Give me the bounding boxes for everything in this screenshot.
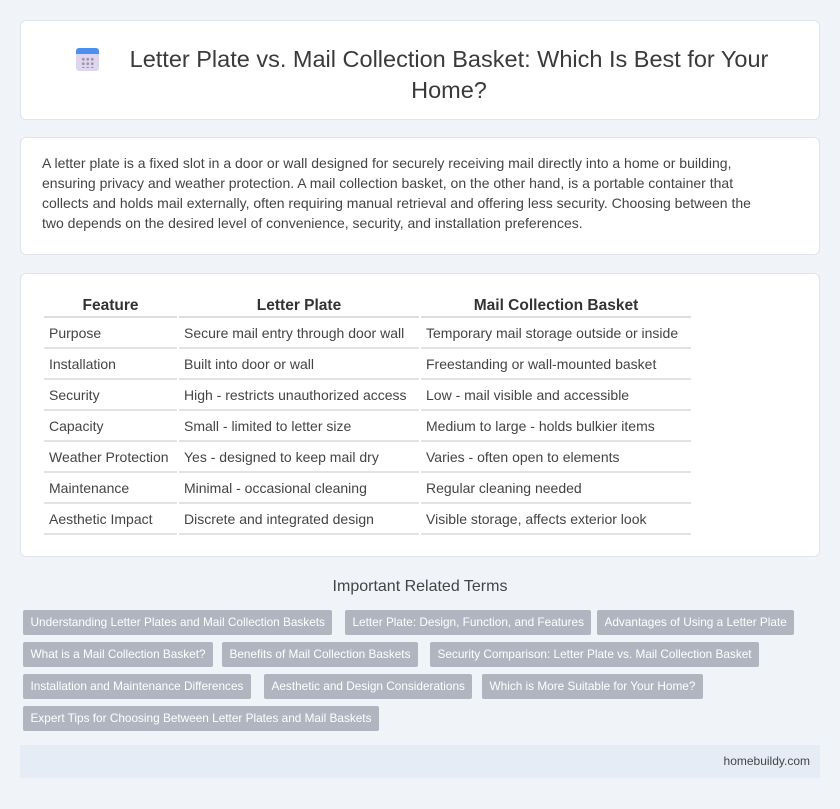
comparison table: Regular cleaning needed bbox=[426, 480, 582, 496]
comparison table: High - restricts unauthorized access bbox=[184, 386, 407, 402]
tags: Benefits of Mail Collection Baskets bbox=[230, 647, 410, 661]
comparison table: Freestanding or wall-mounted basket bbox=[426, 356, 656, 372]
comparison table: Aesthetic Impact bbox=[49, 510, 152, 526]
tags: Expert Tips for Choosing Between Letter Plates and Mail Baskets bbox=[30, 711, 371, 725]
comparison table: Security bbox=[49, 386, 100, 402]
title: Letter Plate vs. Mail Collection Basket: Which Is Best for Your Home? bbox=[130, 46, 768, 103]
header card bbox=[20, 20, 820, 120]
comparison table: Yes - designed to keep mail dry bbox=[184, 448, 379, 464]
tags: Security Comparison: Letter Plate vs. Mail Collection Basket bbox=[438, 647, 752, 661]
tags: Advantages of Using a Letter Plate bbox=[604, 615, 787, 629]
comparison table: Letter Plate bbox=[257, 297, 341, 314]
comparison table: Purpose bbox=[49, 324, 101, 340]
icon: calendar bbox=[76, 48, 99, 71]
footer: homebuildy.com bbox=[724, 754, 810, 768]
comparison table: Varies - often open to elements bbox=[426, 448, 620, 464]
comparison table: Medium to large - holds bulkier items bbox=[426, 418, 655, 434]
tags: Which is More Suitable for Your Home? bbox=[490, 679, 695, 693]
comparison table: Minimal - occasional cleaning bbox=[184, 480, 367, 496]
comparison table: Built into door or wall bbox=[184, 356, 314, 372]
tags: Understanding Letter Plates and Mail Collection Baskets bbox=[30, 615, 325, 629]
intro text: A letter plate is a fixed slot in a door or wall designed for securely receiving mail directly into a home or building, ensuring privacy and weather protection. A mail collection basket, on the other hand, is a portable container that collects and holds mail externally, often requiring manual retrieval and offering less security. Choosing between the two depends on the desired level of convenience, security, and installation preferences. bbox=[42, 155, 751, 231]
tags: Aesthetic and Design Considerations bbox=[272, 679, 465, 693]
tags: What is a Mail Collection Basket? bbox=[30, 647, 206, 661]
tags: Letter Plate: Design, Function, and Features bbox=[352, 615, 584, 629]
comparison table: Weather Protection bbox=[49, 448, 169, 464]
comparison table: Installation bbox=[49, 356, 116, 372]
comparison table bbox=[20, 273, 820, 557]
comparison table: Capacity bbox=[49, 418, 103, 434]
comparison table: Discrete and integrated design bbox=[184, 510, 374, 526]
comparison table: Secure mail entry through door wall bbox=[184, 324, 404, 340]
comparison table: Visible storage, affects exterior look bbox=[426, 510, 646, 526]
comparison table: Mail Collection Basket bbox=[474, 297, 638, 314]
intro text bbox=[20, 137, 820, 255]
comparison table: Temporary mail storage outside or inside bbox=[426, 324, 678, 340]
tags: Installation and Maintenance Differences bbox=[30, 679, 243, 693]
footer bbox=[20, 745, 820, 778]
comparison table: Maintenance bbox=[49, 480, 129, 496]
related terms heading: Important Related Terms bbox=[333, 578, 507, 595]
comparison table: Small - limited to letter size bbox=[184, 418, 351, 434]
comparison table: Feature bbox=[82, 297, 138, 314]
comparison table: Low - mail visible and accessible bbox=[426, 386, 629, 402]
